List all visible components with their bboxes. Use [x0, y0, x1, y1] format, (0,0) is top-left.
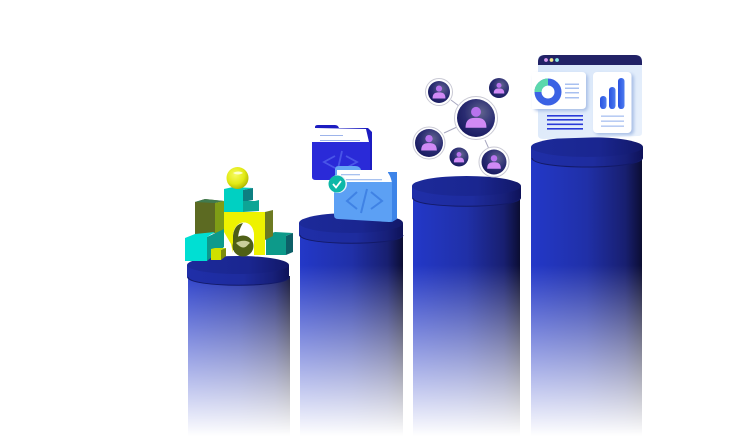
icon: code folders: [312, 125, 397, 222]
browser window: [538, 55, 642, 139]
network connectors: [444, 100, 489, 149]
bottom right avatar: [479, 147, 509, 177]
column 1: [186, 256, 293, 436]
column 2 body: [298, 236, 405, 436]
back olive block: [195, 199, 224, 238]
small yellow block: [211, 248, 226, 260]
column 4 cap: [531, 137, 643, 167]
column 3 body: [411, 198, 522, 436]
icon: analytics dashboard: [532, 55, 642, 139]
column 1 cap: [187, 256, 289, 285]
arch opening: [233, 222, 254, 255]
yellow arch: [224, 212, 265, 255]
top teal block: [224, 187, 253, 212]
column 2 cap: [299, 213, 403, 243]
icon: colourful building blocks: [185, 167, 293, 261]
column 1 body: [186, 265, 293, 436]
left avatar: [413, 127, 445, 159]
front folder: [328, 166, 397, 222]
icon: people network: [413, 78, 509, 177]
glass sphere: [232, 236, 254, 256]
top right avatar: [489, 78, 509, 98]
left donut card: [532, 72, 588, 111]
column 2: [298, 213, 405, 436]
column 3: [411, 176, 522, 436]
window title bar: [538, 55, 642, 65]
check badge: [329, 175, 347, 193]
small centre avatar: [450, 148, 468, 166]
column 4 body: [529, 158, 644, 436]
yellow ball: [226, 167, 248, 189]
main avatar: [454, 96, 498, 140]
back folder: [312, 125, 372, 180]
right teal block: [266, 232, 293, 255]
top left avatar: [426, 78, 452, 106]
text lines: [547, 115, 583, 130]
column 3 cap: [412, 176, 521, 206]
left cyan block: [185, 232, 215, 261]
column 4: [529, 137, 644, 436]
right bar chart card: [593, 72, 634, 135]
